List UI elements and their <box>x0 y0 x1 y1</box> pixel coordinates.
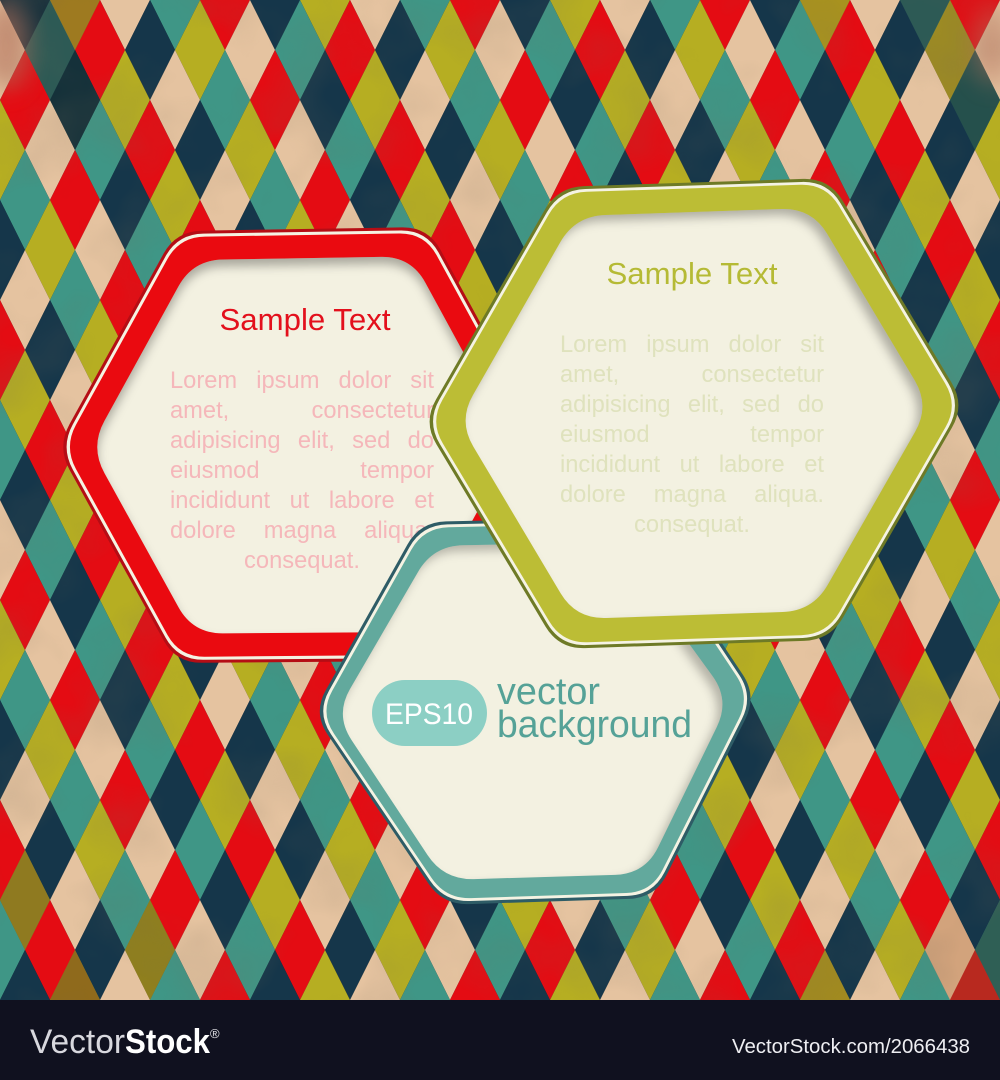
red panel body text: dolore magna aliqua. <box>170 518 434 544</box>
label: vector background: background <box>497 704 692 746</box>
red panel body text: adipisicing elit, sed do <box>170 428 434 454</box>
yellow panel body text: adipisicing elit, sed do <box>560 392 824 418</box>
yellow panel body text: consequat. <box>634 512 750 538</box>
badge: EPS10 <box>372 680 487 746</box>
badge: EPS10: EPS10 <box>385 698 473 731</box>
logo: VectorStock: Vector <box>30 1023 125 1061</box>
yellow panel body text: amet, consectetur <box>560 362 824 388</box>
yellow panel heading: Sample Text <box>606 257 778 291</box>
yellow panel body text: eiusmod tempor <box>560 422 824 448</box>
yellow panel body text: incididunt ut labore et <box>560 452 824 478</box>
panel: teal hexagon <box>320 520 750 904</box>
logo: VectorStock: Stock <box>125 1023 210 1061</box>
image id: VectorStock.com/2066438 <box>732 1036 970 1058</box>
red panel body text: consequat. <box>244 548 360 574</box>
red panel body text: eiusmod tempor <box>170 458 434 484</box>
red panel body text: incididunt ut labore et <box>170 488 434 514</box>
panel: red hexagon <box>63 227 480 663</box>
red panel body text: Lorem ipsum dolor sit <box>170 368 434 394</box>
red panel body text: amet, consectetur <box>170 398 434 424</box>
yellow panel body text: dolore magna aliqua. <box>560 482 824 508</box>
logo: VectorStock <box>30 1023 220 1061</box>
footer bar <box>0 1000 1000 1080</box>
label: vector background: vector <box>497 671 600 713</box>
yellow panel body text: Lorem ipsum dolor sit <box>560 332 824 358</box>
panel: yellow-green hexagon <box>430 178 958 648</box>
red panel heading: Sample Text <box>220 303 391 337</box>
label: vector background <box>497 671 692 746</box>
logo: VectorStock: ® <box>210 1026 220 1041</box>
yellow panel body text <box>560 332 824 538</box>
red panel body text <box>170 368 434 574</box>
